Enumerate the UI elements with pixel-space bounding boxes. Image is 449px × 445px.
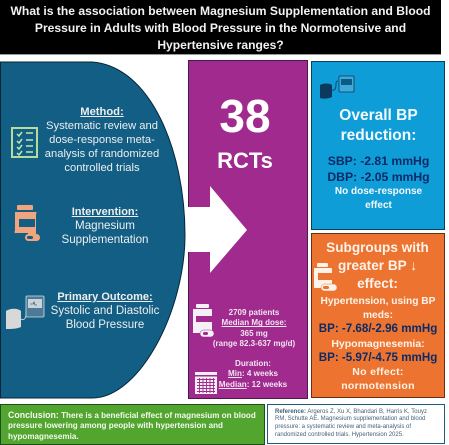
text: patients and dose: 365 mg bbox=[240, 329, 268, 338]
title: What is the association between Magnesium Supplementation and Blood bbox=[11, 4, 430, 18]
panel: reference: pressure: a systematic review and meta-analysis of bbox=[275, 424, 411, 430]
value: hypertension BP: BP: -7.68/-2.96 mmHg bbox=[319, 322, 437, 335]
heading: overall BP reduction bbox=[339, 107, 418, 144]
text: no effect bbox=[341, 366, 415, 392]
heading: method bbox=[45, 106, 159, 174]
title: Pressure in Adults with Blood Pressure in the Normotensive and bbox=[35, 21, 406, 35]
heading: primary outcome: Blood Pressure bbox=[66, 319, 144, 331]
text: no dose-response effect: effect bbox=[365, 200, 392, 210]
panel: reference: Reference: Argeros Z, Xu X, Bhandari B, Harris K, Touyz bbox=[275, 408, 427, 414]
text: patients and dose: Median Mg dose: bbox=[222, 318, 286, 327]
heading: intervention: Supplementation bbox=[61, 233, 148, 246]
text: patients and dose: (range 82.3-637 mg/d) bbox=[213, 339, 295, 348]
text: hypertension subgroup bbox=[321, 296, 436, 321]
stat: 38: 38 bbox=[219, 90, 271, 142]
text: hypomagnesemia subgroup: Hypomagnesemia: bbox=[331, 338, 425, 350]
title bbox=[0, 0, 441, 55]
heading: primary outcome: Primary Outcome: bbox=[57, 291, 153, 303]
panel: conclusion: hypomagnesemia. bbox=[8, 432, 79, 440]
label: RCTs: RCTs bbox=[217, 148, 273, 173]
heading: method: Method: bbox=[80, 106, 124, 118]
heading: primary outcome bbox=[51, 291, 160, 331]
panel: subgroups bbox=[311, 233, 445, 398]
heading: primary outcome: Systolic and Diastolic bbox=[51, 305, 159, 317]
text: no effect: No effect: bbox=[352, 366, 404, 378]
panel: overall BP reduction bbox=[311, 61, 445, 230]
heading: subgroups: effect: bbox=[357, 276, 398, 291]
heading: method: dose-response meta- bbox=[49, 134, 155, 146]
text: duration bbox=[218, 359, 287, 389]
values: SBP and DBP: SBP: -2.81 mmHg bbox=[328, 154, 429, 168]
text: hypertension subgroup: meds: bbox=[363, 310, 393, 321]
panel: reference: RM, Schutte AE. Magnesium supplementation and blood bbox=[275, 416, 425, 422]
heading: method: Systematic review and bbox=[46, 120, 158, 132]
text: no dose-response effect bbox=[335, 186, 422, 210]
panel: reference: randomized controlled trials. Hypertension 2025. bbox=[275, 432, 404, 438]
title: Hypertensive ranges? bbox=[157, 38, 284, 52]
heading: subgroups: greater BP ↓ bbox=[338, 258, 417, 273]
heading: method: analysis of randomized bbox=[45, 148, 159, 160]
heading: subgroups: Subgroups with bbox=[326, 240, 429, 255]
text: duration: Min: 4 weeks bbox=[228, 369, 278, 378]
heading: overall BP reduction: reduction: bbox=[341, 127, 416, 144]
text: hypertension subgroup: Hypertension, using BP bbox=[321, 296, 435, 307]
heading: intervention bbox=[61, 206, 148, 246]
heading: subgroups bbox=[326, 240, 429, 291]
panel: purple studies bbox=[188, 60, 308, 399]
values: SBP and DBP bbox=[327, 154, 430, 184]
text: patients and dose bbox=[213, 308, 295, 348]
text: duration: Median: 12 weeks bbox=[219, 380, 287, 389]
text: no effect: normotension bbox=[341, 380, 415, 392]
text: patients and dose: 2709 patients bbox=[229, 308, 279, 317]
panel: reference bbox=[267, 404, 445, 444]
heading: overall BP reduction: Overall BP bbox=[339, 107, 418, 124]
text: no dose-response effect: No dose-response bbox=[335, 186, 422, 197]
panel: conclusion: pressure lowering among people with hypertension and bbox=[8, 421, 223, 430]
heading: method: controlled trials bbox=[64, 162, 140, 174]
values: SBP and DBP: DBP: -2.05 mmHg bbox=[327, 170, 430, 184]
panel: conclusion bbox=[0, 404, 265, 445]
text: duration: Duration: bbox=[235, 359, 271, 368]
value: hypomagnesemia BP: BP: -5.97/-4.75 mmHg bbox=[319, 351, 437, 364]
heading: intervention: Magnesium bbox=[75, 219, 135, 232]
heading: intervention: Intervention: bbox=[72, 206, 138, 218]
panel: conclusion: Conclusion: There is a beneficial effect of magnesium on blood bbox=[8, 410, 256, 420]
